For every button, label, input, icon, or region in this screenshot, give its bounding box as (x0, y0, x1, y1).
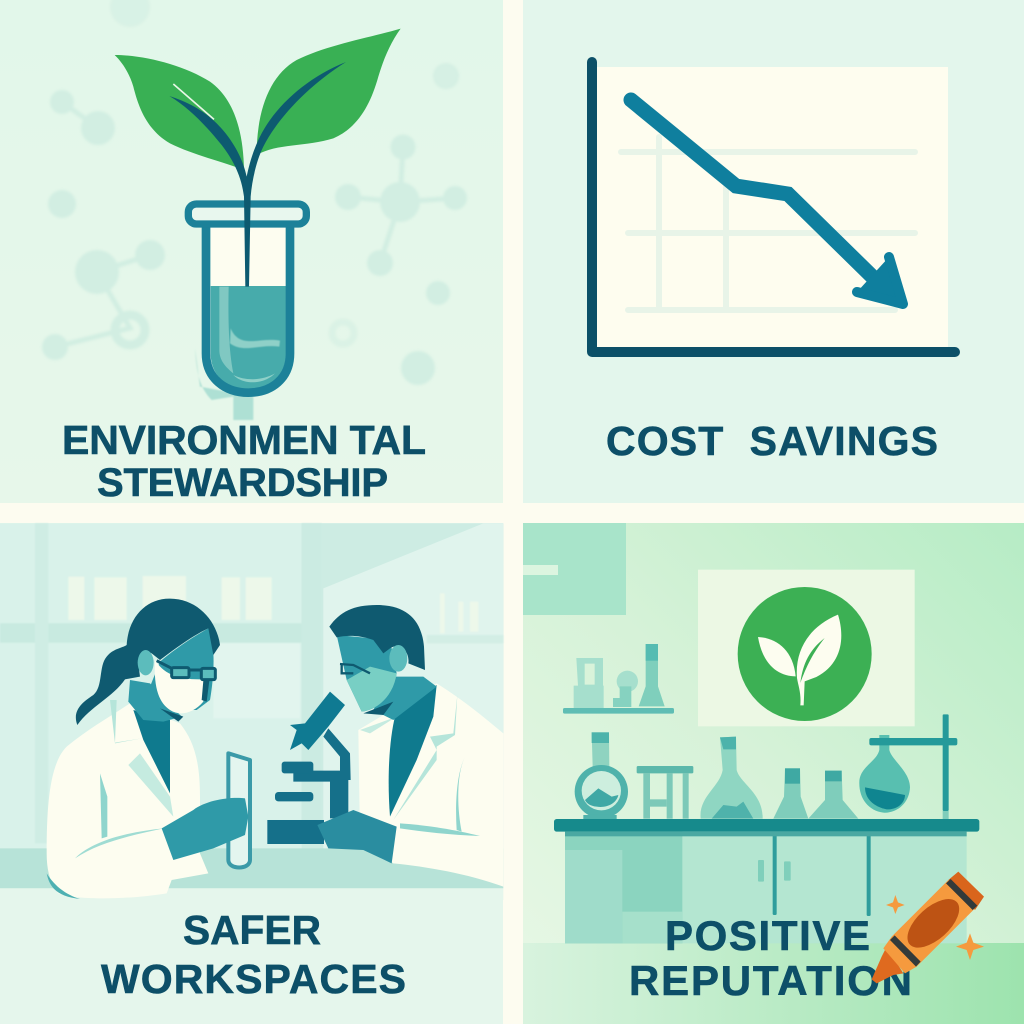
heading: environmental stewardship (62, 417, 426, 505)
axes (592, 62, 955, 352)
heading: environmental stewardship: ENVIRONMEN TAL (62, 417, 426, 463)
hair (76, 599, 220, 725)
lab scene (0, 523, 503, 900)
chart: falling cost line (592, 62, 955, 352)
woman scientist (47, 599, 220, 899)
sparkles (886, 895, 905, 914)
microscope (267, 692, 351, 844)
heading: cost savings: COST SAVINGS (606, 418, 938, 464)
heading: safer workspaces: SAFER (183, 907, 321, 953)
icon: plant in test tube (115, 29, 401, 420)
cabinets (565, 832, 967, 943)
test tube (228, 753, 250, 867)
wide flask (700, 737, 763, 819)
flask on stand (859, 714, 957, 819)
neck (128, 680, 182, 722)
heading: positive reputation: POSITIVE (665, 912, 870, 959)
woman hand (162, 798, 248, 860)
panel: safer workspaces (0, 523, 503, 1024)
panel: positive reputation (523, 523, 1024, 1024)
heading: environmental stewardship: STEWARDSHIP (97, 461, 388, 505)
glasses (157, 661, 215, 680)
face (337, 635, 397, 712)
face (150, 628, 214, 710)
counter (0, 848, 503, 888)
heading: safer workspaces (101, 907, 406, 1002)
left leaf (115, 55, 244, 170)
heading: positive reputation: REPUTATION (629, 957, 912, 1004)
mask (155, 660, 204, 713)
panel: environmental stewardship (0, 0, 503, 505)
man scientist (317, 605, 503, 887)
arrow (631, 100, 903, 304)
hand (317, 810, 397, 863)
icon: crayon (872, 872, 984, 983)
background molecules (42, 0, 467, 385)
tube glass (211, 227, 286, 287)
hair (329, 605, 425, 670)
small flasks (773, 768, 858, 819)
bench glassware (554, 714, 979, 943)
shelf with bottles (563, 644, 674, 714)
heading: safer workspaces: WORKSPACES (101, 956, 406, 1002)
stool (637, 766, 693, 819)
tube outline (206, 227, 290, 393)
round flask (575, 732, 628, 819)
stem (169, 62, 346, 287)
heading: positive reputation (629, 912, 912, 1004)
poster with leaf badge (698, 570, 915, 726)
right leaf (257, 29, 401, 155)
panel: cost savings (523, 0, 1024, 503)
neck (373, 677, 437, 720)
